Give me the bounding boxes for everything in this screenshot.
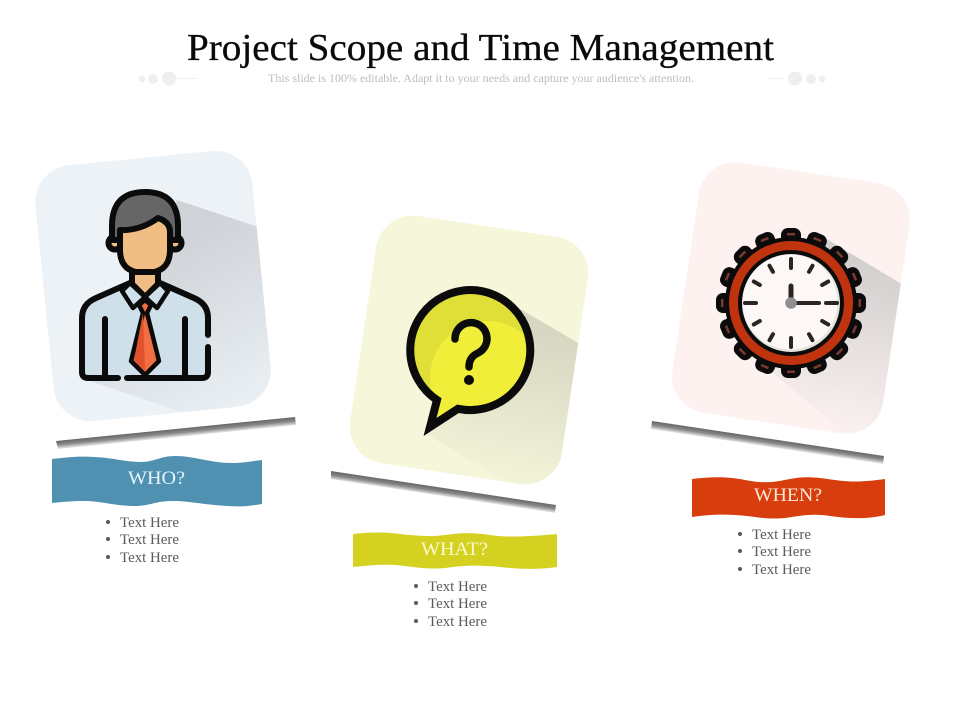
bullet list: what: Text Here <box>428 579 487 595</box>
bullet list: when: Text Here <box>752 527 811 543</box>
banner: who <box>52 456 262 506</box>
long shadow: what <box>428 308 578 484</box>
banner label: what: WHAT? <box>421 539 488 560</box>
banner label: who: WHO? <box>128 468 185 489</box>
bullet list: what: Text Here <box>428 614 487 630</box>
card: what <box>345 211 593 489</box>
panel: what <box>331 211 610 630</box>
banner: what <box>353 532 557 569</box>
icon: businessman <box>82 192 208 378</box>
bullet list: what: Text Here <box>428 596 487 612</box>
bullet list: who <box>106 515 179 566</box>
divider bar: who <box>56 417 296 449</box>
card: when <box>667 157 915 439</box>
long shadow: who <box>90 200 270 406</box>
decoration: right dots <box>767 72 826 86</box>
banner label: when: WHEN? <box>754 485 822 506</box>
banner: when <box>692 477 885 519</box>
panel: who <box>32 147 296 566</box>
title: Project Scope and Time Management <box>187 27 774 69</box>
divider bar: what <box>331 471 556 513</box>
bullet list: what <box>414 579 487 630</box>
bullet list: who: Text Here <box>120 550 179 566</box>
divider bar: when <box>651 421 884 464</box>
icon: question bubble <box>410 290 544 435</box>
bullet list: who: Text Here <box>120 532 179 548</box>
panel: when <box>651 157 930 578</box>
infographic <box>35 33 910 626</box>
card: who <box>32 147 274 425</box>
decoration: left dots <box>138 72 197 86</box>
bullet list: who: Text Here <box>120 515 179 531</box>
bullet list: when: Text Here <box>752 544 811 560</box>
bullet list: when <box>738 527 811 578</box>
subtitle: This slide is 100% editable. Adapt it to your needs and capture your audience's attention. <box>268 73 694 85</box>
long shadow: when <box>773 238 901 412</box>
icon: clock gear <box>716 228 866 378</box>
bullet list: when: Text Here <box>752 562 811 578</box>
